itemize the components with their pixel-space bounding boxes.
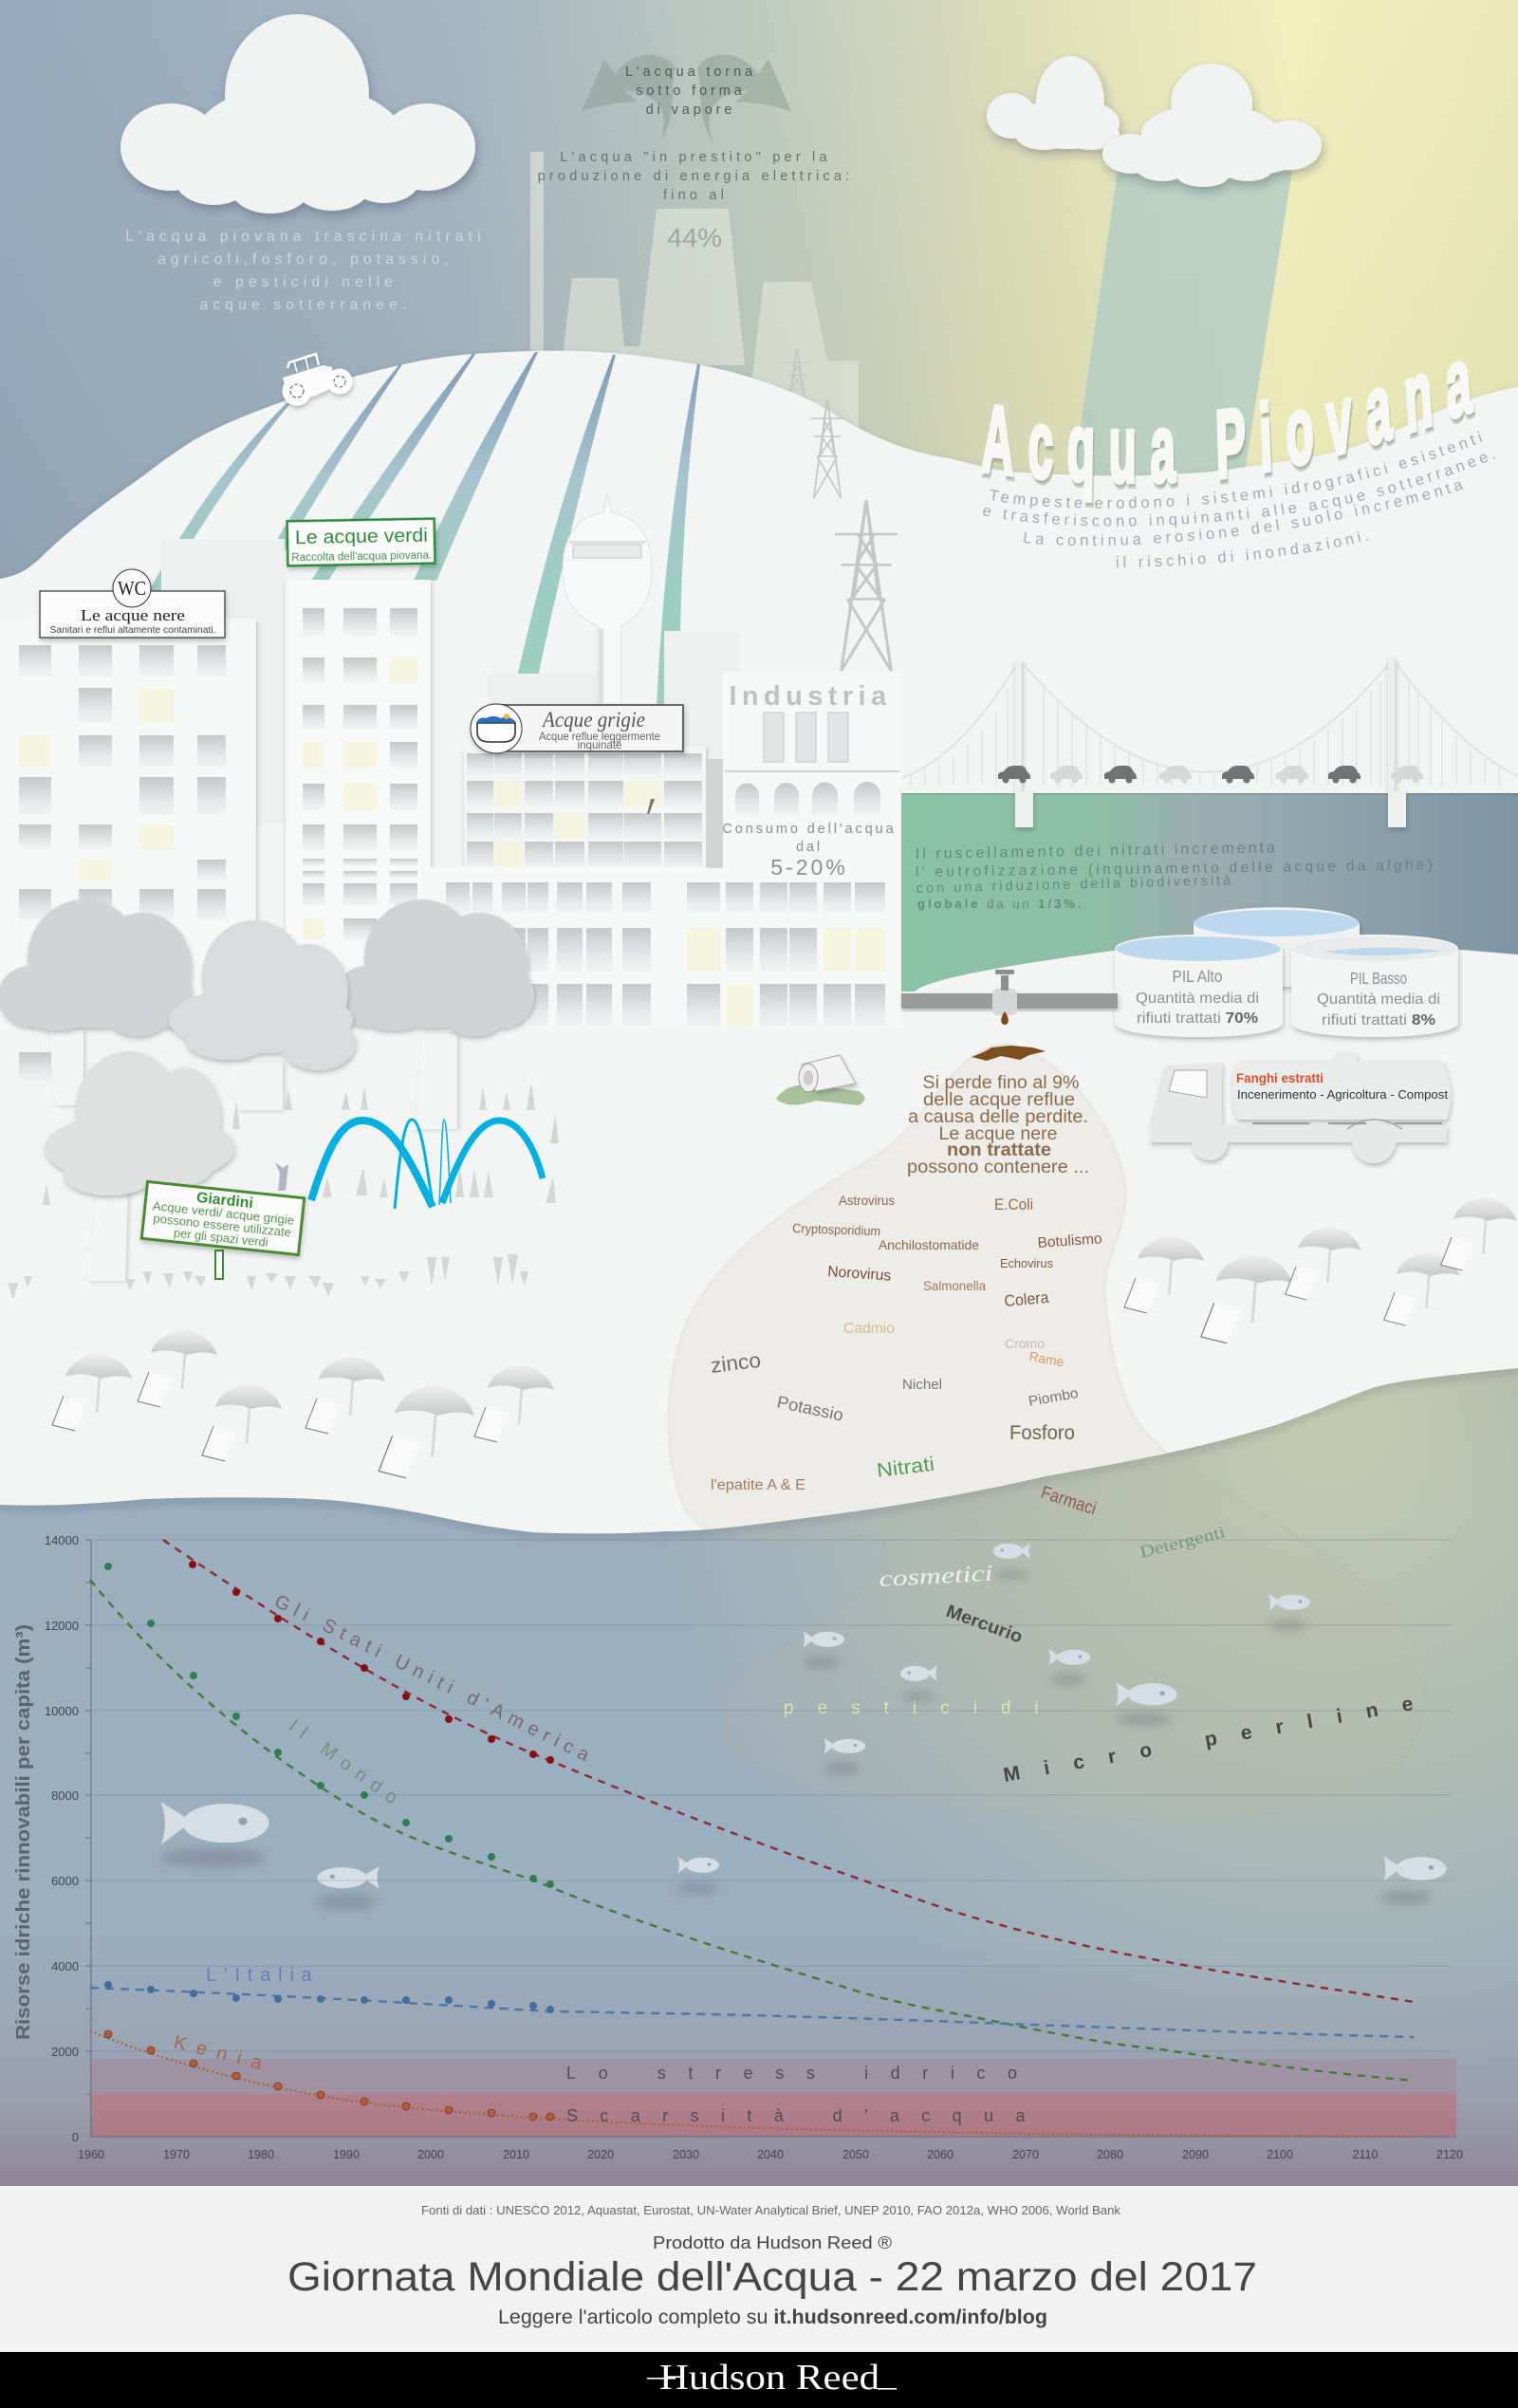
stat: 44%: 44%: [667, 223, 722, 252]
icon: steam wings: [582, 55, 791, 140]
x axis labels: 2020: [587, 2148, 614, 2161]
band label: water scarcity: Scarsità d'acqua: [566, 2106, 1047, 2125]
bridge towers: [1015, 657, 1406, 827]
building: grey water block: [464, 746, 706, 874]
sign: gardens: Giardini: [195, 1190, 254, 1212]
fish group with shadows: [161, 1543, 1447, 1910]
word cloud: contaminants on land: Potassio: [775, 1392, 845, 1425]
text: water returns as vapour: [625, 65, 756, 118]
building: industry: [708, 672, 901, 882]
word cloud: contaminants on land: Fosforo: [1009, 1422, 1075, 1444]
tank: PIL Basso: Quantità media di: [1317, 991, 1440, 1008]
sign: green water: Raccolta dell'acqua piovana.: [291, 550, 432, 564]
x axis labels: 1980: [248, 2148, 274, 2161]
x axis labels: 1970: [163, 2148, 190, 2161]
band label: water stress: Lo stress idrico: [566, 2064, 1040, 2083]
power plant silhouette: [530, 152, 859, 436]
tank: PIL Basso: [1291, 935, 1458, 1037]
sign: black water: [40, 569, 225, 638]
building: second tower: [286, 580, 431, 1044]
word cloud: contaminants on land: Norovirus: [827, 1264, 892, 1285]
x axis labels: 1990: [333, 2148, 360, 2161]
word cloud: contaminants in water: Farmaci: [1038, 1483, 1099, 1519]
heading: World Water Day: Giornata Mondiale dell'Acqua - 22 marzo del 2017: [287, 2254, 1257, 2300]
text: nitrate runoff: Il ruscellamento dei nitrati incrementa: [916, 840, 1278, 862]
word cloud: contaminants in water: Detergenti: [1138, 1522, 1227, 1562]
icon: left cloud: [120, 14, 475, 213]
text: data sources: Fonti di dati : UNESCO 2012, Aquastat, Eurostat, UN-Water Analytical Brief, UNEP 2010, FAO 2012a, WHO 2006, World Bank: [421, 2203, 1121, 2217]
lower ground overlap: [901, 941, 1518, 1044]
lawn behind trees with faded window: [0, 1028, 588, 1152]
y axis labels: 12000: [45, 1619, 79, 1633]
tank: PIL Alto: Quantità media di: [1136, 991, 1259, 1007]
x axis labels: 2100: [1267, 2148, 1293, 2161]
word cloud: contaminants on land: Colera: [1004, 1288, 1050, 1310]
text: water returns as vapour: L'acqua torna: [625, 65, 756, 80]
text: nitrate runoff: globale da un 1/3%.: [917, 897, 1084, 911]
x axis labels: 2000: [417, 2148, 444, 2161]
x axis labels: 2030: [673, 2148, 699, 2161]
field furrows: [148, 352, 700, 707]
text: rain carries pollutants: [125, 229, 486, 313]
x axis labels: 2080: [1097, 2148, 1123, 2161]
rain beam: [1072, 171, 1292, 484]
text: storms paragraph: Tempeste erodono i sistemi idrografici esistenti: [990, 431, 1482, 509]
word cloud: contaminants on land: Nitrati: [876, 1454, 935, 1482]
brand bar: [0, 2352, 1518, 2408]
line label: World: Il Mondo: [285, 1715, 408, 1813]
text: nitrate runoff: con una riduzione della biodiversità: [916, 873, 1234, 897]
text: rain carries pollutants: e pesticidi nelle: [213, 274, 398, 290]
tank: PIL Basso: rifiuti trattati 8%: [1322, 1012, 1435, 1028]
water: [0, 1347, 1518, 2187]
trend: USA: [163, 1540, 1414, 2002]
word cloud: contaminants on land: Rame: [1027, 1348, 1065, 1369]
text: water returns as vapour: di vapore: [646, 102, 735, 118]
icon: fountain: [311, 1120, 543, 1209]
sign: grey water: Acque reflue leggermente: [539, 730, 660, 743]
y axis labels: 8000: [51, 1788, 79, 1803]
word cloud: contaminants on land: [710, 1194, 1102, 1493]
text: untreated wastewater: delle acque reflue: [923, 1089, 1075, 1110]
pollution blob: [668, 1044, 1425, 1820]
x axis labels: 2110: [1353, 2148, 1378, 2161]
sign: green water: [287, 519, 435, 565]
word cloud: contaminants on land: Cryptosporidium: [792, 1221, 880, 1238]
sign: gardens: per gli spazi verdi: [173, 1226, 268, 1250]
text: nitrate runoff: l' eutrofizzazione (inquinamento delle acque da alghe): [916, 857, 1435, 880]
tank: PIL Alto: rifiuti trattati 70%: [1137, 1010, 1258, 1027]
x axis labels: 2090: [1182, 2148, 1209, 2161]
y axis labels: 0: [72, 2130, 79, 2144]
bridge: [901, 657, 1518, 827]
building: low wide block: [422, 867, 901, 1028]
text: borrowed water for electricity: [538, 150, 853, 203]
text: sludge label: Fanghi estratti: [1236, 1071, 1324, 1085]
text: storms paragraph: [983, 431, 1495, 567]
cars: [998, 766, 1423, 784]
word cloud: contaminants in water: [784, 1483, 1438, 1787]
sign: grey water: inquinate: [577, 738, 622, 751]
sign: grey water: Acque grigie: [541, 708, 645, 732]
x axis labels: 2120: [1436, 2148, 1463, 2161]
word cloud: contaminants on land: Cromo: [1005, 1337, 1045, 1351]
text: industry water use: Consumo dell'acqua: [722, 822, 897, 837]
icon: bathtub: [476, 713, 516, 742]
title: Acqua Piovana: Acqua Piovana: [981, 361, 1474, 503]
text: untreated wastewater: Le acque nere: [939, 1123, 1057, 1144]
chart: renewable water per capita: [13, 1533, 1463, 2161]
text: storms paragraph: La continua erosione del suolo incrementa: [1024, 482, 1463, 546]
tank: PIL Alto: PIL Alto: [1173, 967, 1222, 986]
text: industry water use: [722, 822, 897, 880]
sign: gardens: [141, 1181, 305, 1279]
water stress bands: [90, 2059, 1456, 2137]
text: read the article: Leggere l'articolo completo su it.hudsonreed.com/info/blog: [498, 2306, 1047, 2328]
word cloud: contaminants on land: Nichel: [902, 1378, 942, 1393]
icon: small animal: [275, 1162, 288, 1191]
icon: right clouds: [987, 56, 1322, 187]
x axis labels: [78, 2148, 1463, 2161]
line label: USA: Gli Stati Uniti d'America: [271, 1591, 598, 1769]
text: untreated wastewater: a causa delle perdite.: [908, 1106, 1088, 1127]
icon: tractor: [283, 354, 353, 406]
text: untreated wastewater: [907, 1072, 1089, 1177]
y axis labels: 6000: [51, 1874, 79, 1888]
word cloud: contaminants on land: E.Coli: [994, 1195, 1033, 1213]
icon: spilled barrel: [776, 1055, 865, 1105]
y axis labels: 2000: [51, 2045, 79, 2059]
sky background: [0, 0, 1518, 607]
sign: black water: WC: [118, 577, 146, 600]
line label: Italy: L'Italia: [206, 1965, 320, 1986]
text: industry water use: dal: [796, 840, 823, 855]
word cloud: contaminants on land: zinco: [710, 1348, 762, 1378]
word cloud: contaminants in water: Mercurio: [943, 1602, 1025, 1647]
icon: pylons behind hill: [783, 348, 811, 419]
text: borrowed water for electricity: produzione di energia elettrica:: [538, 169, 853, 184]
sign: grey water: [471, 704, 683, 753]
text: untreated wastewater: non trattate: [947, 1139, 1051, 1160]
grass: [8, 1082, 559, 1300]
word cloud: contaminants on land: Cadmio: [843, 1321, 895, 1337]
word cloud: contaminants on land: Astrovirus: [839, 1194, 895, 1208]
y axis labels: 10000: [45, 1704, 79, 1718]
building: left tower: [0, 619, 256, 1044]
water tower: [563, 493, 652, 731]
tanks: [1115, 907, 1458, 1037]
fish: far right: [1383, 1856, 1447, 1881]
x axis labels: 1960: [78, 2148, 104, 2161]
x axis labels: 2060: [927, 2148, 953, 2161]
y axis labels: 4000: [51, 1959, 79, 1973]
text: water returns as vapour: sotto forma: [636, 83, 746, 99]
y axis labels: 14000: [45, 1533, 79, 1547]
sign: gardens: Acque verdi/ acque grigie: [152, 1198, 295, 1228]
beach umbrellas left: [52, 1330, 554, 1478]
word cloud: contaminants on land: Botulismo: [1037, 1231, 1102, 1251]
river under bridge: [901, 792, 1518, 1001]
y axis title: Risorse idriche rinnovabili per capita (m³): [13, 1624, 34, 2040]
title: Acqua Piovana: Acqua Piovana: [981, 372, 1476, 509]
word cloud: contaminants in water: cosmetici: [879, 1562, 993, 1592]
text: borrowed water for electricity: fino al: [663, 188, 728, 203]
tank: PIL Alto: [1115, 935, 1283, 1037]
word cloud: contaminants on land: Anchilostomatide: [879, 1237, 979, 1252]
text: rain carries pollutants: acque sotterranee.: [200, 297, 411, 313]
fish: school in pollution: [803, 1543, 1310, 1754]
text: storms paragraph: e trasferiscono inquinanti alle acque sotterranee.: [983, 454, 1495, 528]
text: borrowed water for electricity: L'acqua "in prestito" per la: [560, 150, 831, 165]
sign: black water: Sanitari e reflui altamente contaminati.: [49, 624, 216, 636]
sign: gardens: possono essere utilizzate: [153, 1211, 292, 1240]
x axis labels: 2040: [757, 2148, 784, 2161]
text: industry water use: 5-20%: [770, 855, 848, 880]
building: industry: Industria: [729, 681, 892, 712]
word cloud: contaminants in water: Micro perline: [1002, 1689, 1438, 1787]
x axis labels: 2010: [503, 2148, 529, 2161]
text: produced by: Prodotto da Hudson Reed ®: [653, 2233, 892, 2252]
back buildings: [161, 539, 740, 868]
fish: large: [161, 1802, 269, 1844]
trend: World: [90, 1563, 1414, 2081]
text: sludge label: [1236, 1071, 1448, 1102]
fish: medium: [317, 1866, 380, 1889]
word cloud: contaminants in water: pesticidi: [784, 1698, 1063, 1718]
text: untreated wastewater: Si perde fino al 9%: [922, 1072, 1080, 1093]
footer panel: [0, 2186, 1518, 2352]
text: nitrate runoff: [916, 840, 1435, 911]
word cloud: contaminants on land: Piombo: [1027, 1385, 1080, 1410]
pipe and valve: [901, 970, 1118, 1025]
text: rain carries pollutants: L'acqua piovana trascina nitrati: [125, 229, 486, 245]
word cloud: contaminants on land: Salmonella: [923, 1279, 986, 1293]
tank: PIL Basso: PIL Basso: [1350, 969, 1407, 988]
tank: back: [1194, 907, 1360, 987]
text: sludge label: Incenerimento - Agricoltura - Compost: [1237, 1087, 1448, 1102]
sign: green water: Le acque verdi: [295, 526, 428, 548]
trend: Italy: [90, 1981, 1414, 2037]
x axis labels: 2050: [842, 2148, 869, 2161]
beach umbrellas right: [1124, 1197, 1516, 1343]
x axis labels: 2070: [1012, 2148, 1039, 2161]
logo: Hudson Reed: Hudson Reed: [659, 2358, 879, 2398]
sign: black water: Le acque nere: [81, 606, 185, 624]
y axis labels: [45, 1533, 79, 2144]
tree trunks: [49, 1029, 457, 1281]
text: storms paragraph: il rischio di inondazioni.: [1116, 531, 1368, 567]
ground: hill and land: [0, 351, 1518, 1533]
text: untreated wastewater: possono contenere ...: [907, 1157, 1089, 1177]
fish: small: [677, 1857, 719, 1874]
puddle: [972, 1046, 1046, 1061]
trend: Kenya: [90, 2030, 1414, 2137]
word cloud: contaminants on land: Echovirus: [1000, 1256, 1053, 1270]
icon: tanker truck: [1150, 1053, 1451, 1163]
text: rain carries pollutants: agricoli,fosforo, potassio,: [157, 251, 454, 268]
word cloud: contaminants on land: l'epatite A & E: [711, 1477, 805, 1493]
line label: Kenya: Kenia: [172, 2032, 274, 2077]
trees: [0, 899, 534, 1195]
icon: pylons: [810, 398, 898, 671]
